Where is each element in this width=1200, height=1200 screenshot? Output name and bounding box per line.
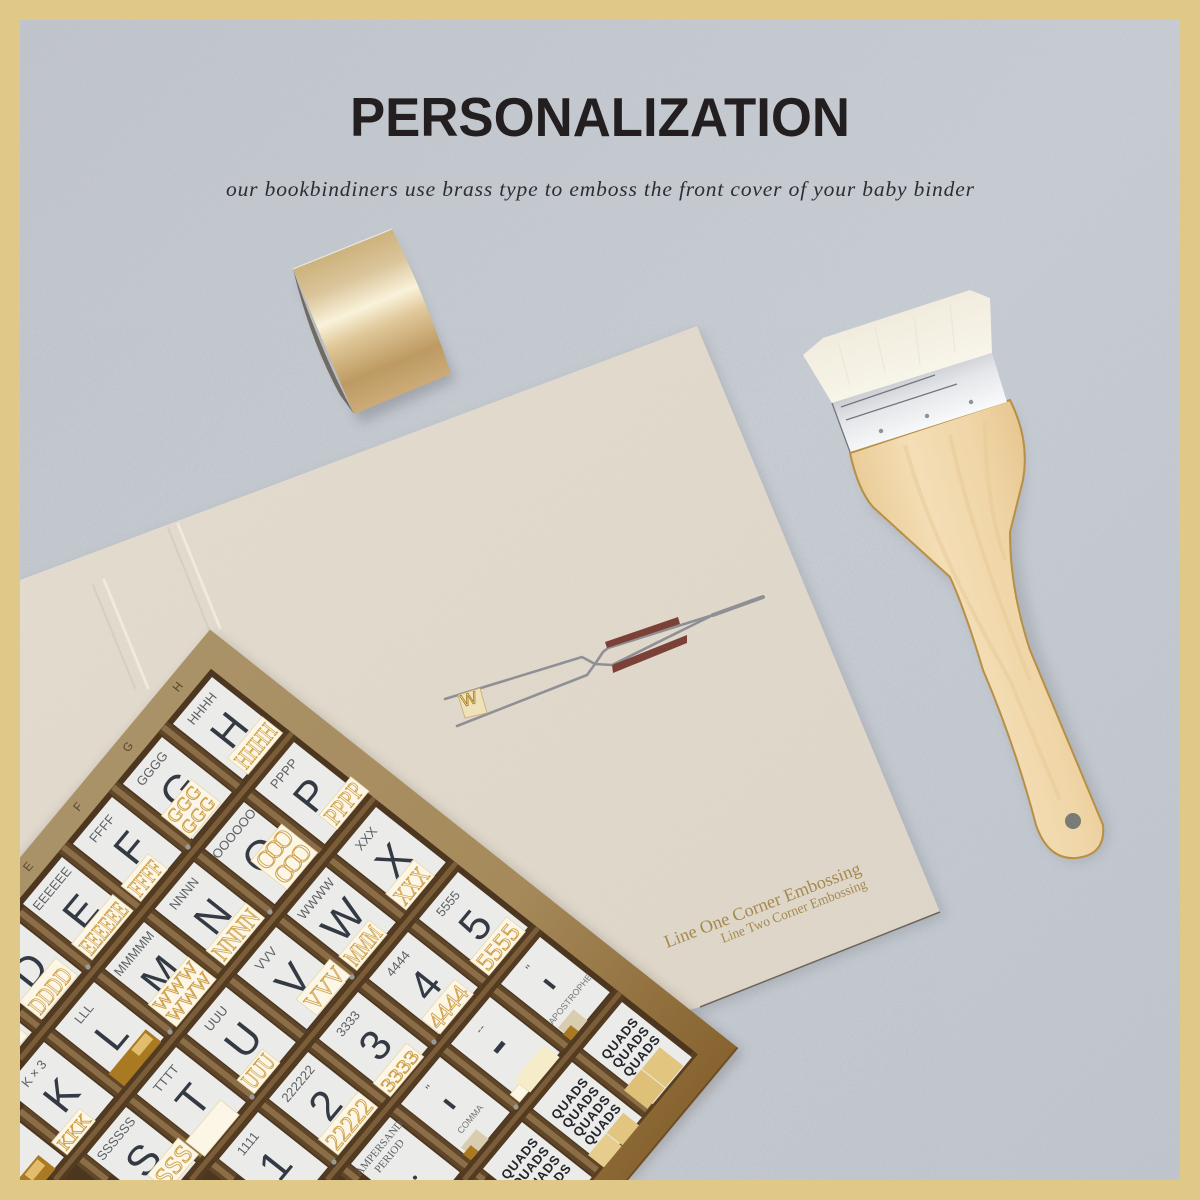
compartment quads row 2: QUADS <box>570 1092 613 1140</box>
compartment V: VVV <box>299 962 351 1016</box>
compartment V: V <box>266 954 322 1007</box>
compartment quads row 1: QUADS <box>609 1023 652 1071</box>
compartment J with brass block <box>20 1122 64 1180</box>
compartment hyphen: -- <box>471 1021 489 1037</box>
compartment M: MMMMM <box>111 928 157 979</box>
compartment T: TTTT <box>150 1062 182 1095</box>
compartment H: HHHH <box>184 690 220 728</box>
compartment 1 <box>219 1112 328 1200</box>
compartment P: PPPP <box>267 756 301 792</box>
compartment quads row 3: QUADS <box>498 1135 542 1182</box>
compartment 5: 5555 <box>433 888 463 919</box>
compartment D <box>20 924 82 1020</box>
compartment 4 <box>369 932 481 1037</box>
compartment comma: COMMA <box>455 1103 485 1135</box>
compartment 2: 2 <box>299 1082 352 1130</box>
compartment ampersand and period <box>348 1115 462 1200</box>
compartment H <box>173 677 284 781</box>
compartment M: WWW <box>163 969 216 1026</box>
compartment G <box>122 737 232 840</box>
compartment 4: 4 <box>399 962 452 1010</box>
compartment 2: 22222 <box>321 1094 379 1155</box>
compartment L: L <box>85 1012 138 1060</box>
compartment 4: 4444 <box>423 980 475 1034</box>
compartment W: W <box>312 890 376 951</box>
compartment 2 <box>268 1052 380 1157</box>
brass letter W <box>458 688 487 718</box>
compartment K: K × 3 <box>18 1057 50 1090</box>
compartment F <box>71 797 184 903</box>
compartment U: UUU <box>201 1003 231 1034</box>
compartment V <box>237 921 352 1030</box>
compartment K <box>20 1042 114 1156</box>
compartment S: S <box>116 1135 172 1187</box>
compartment quads row 1: QUADS <box>598 1015 642 1062</box>
compartment 3: 3 <box>349 1022 402 1070</box>
compartment M <box>104 922 218 1028</box>
compartment apostrophe: APOSTROPHE <box>546 972 594 1026</box>
compartment O <box>205 797 319 906</box>
icon: hake paint brush <box>803 290 1108 862</box>
compartment apostrophe: '' <box>522 962 537 975</box>
tray dividers <box>20 727 647 1180</box>
compartment E <box>22 855 135 962</box>
compartment O: O <box>232 828 291 883</box>
compartment quads row 1 <box>578 1002 692 1109</box>
compartment 3 <box>318 992 432 1098</box>
compartment S: SSSSSS <box>93 1114 139 1163</box>
compartment hyphen <box>449 997 562 1103</box>
compartment X: XXX <box>352 824 380 853</box>
brass letter W: W <box>459 688 480 711</box>
panel: linen binder cover <box>20 326 945 1016</box>
compartment N <box>154 862 267 967</box>
compartment S: SSS <box>150 1140 199 1191</box>
compartment P: P <box>284 770 340 822</box>
tray shadow <box>20 634 744 1180</box>
compartment quads row 2: QUADS <box>581 1101 624 1148</box>
compartment D: DDDD <box>24 963 78 1020</box>
compartment quads row 2 <box>532 1062 644 1168</box>
rail letters <box>20 679 186 874</box>
compartment G: GGG <box>177 793 220 838</box>
icon: tweezers holding brass W type <box>445 597 763 726</box>
compartment E: EEEEEE <box>29 864 75 913</box>
compartment M: M <box>132 947 192 1004</box>
brush bristles <box>803 290 992 403</box>
compartment F: FFFF <box>86 812 118 845</box>
compartment 2: 222222 <box>278 1062 318 1105</box>
title: PERSONALIZATION <box>350 86 850 148</box>
embossed cover text: Line One Corner Embossing <box>661 858 864 952</box>
compartment comma <box>400 1057 511 1161</box>
compartment L: LLL <box>71 1001 97 1027</box>
compartment 5: 5555 <box>471 919 526 976</box>
compartment O: OOO <box>251 824 300 875</box>
compartment 5: 5 <box>449 902 502 950</box>
brush metal ferrule <box>832 353 1007 452</box>
compartment W <box>286 867 399 972</box>
compartment K: KKK <box>54 1110 96 1154</box>
compartment N: NNNN <box>207 905 266 966</box>
brush handle <box>850 400 1103 858</box>
rail letters: G <box>119 739 136 755</box>
rail letters: H <box>170 679 186 695</box>
compartment apostrophe <box>500 936 611 1041</box>
compartment comma: '' <box>422 1082 437 1095</box>
compartment F: FFFF <box>123 856 169 902</box>
compartment 3: 3333 <box>333 1008 363 1039</box>
compartment quads row 1: QUADS <box>620 1032 663 1080</box>
compartment V: VVV <box>252 944 280 973</box>
compartment D: D <box>1 944 59 997</box>
compartment ampersand and period: PERIOD <box>372 1137 407 1175</box>
compartment K: K <box>34 1069 90 1122</box>
compartment 1: 1111 <box>234 1129 262 1158</box>
tray frame rails <box>20 630 738 1180</box>
compartment quads row 3 <box>483 1122 592 1200</box>
compartment L <box>54 982 165 1086</box>
compartment X <box>336 807 448 912</box>
compartment 4: 4444 <box>383 948 413 979</box>
compartment U: UUU <box>237 1049 281 1094</box>
compartment N: NNNN <box>166 875 202 913</box>
compartment U <box>184 987 299 1095</box>
tweezer rubber grips <box>605 617 687 673</box>
panel: wooden type tray with letter compartments <box>0 630 737 1200</box>
compartment C <box>20 1023 32 1046</box>
compartment W: MMM <box>339 921 388 971</box>
compartment X: XXX <box>389 863 435 910</box>
compartment quads row 3: QUADS <box>509 1143 552 1191</box>
compartment quads row 2: QUADS <box>548 1075 592 1122</box>
compartment P: PPPP <box>319 778 370 830</box>
compartment quads row 3: QUADS <box>520 1152 563 1200</box>
compartment O: OOO <box>269 839 318 889</box>
compartment G: GGGG <box>133 748 171 789</box>
compartment G: GGG <box>163 782 206 827</box>
compartment T: T <box>167 1076 221 1126</box>
compartment M: WWW <box>150 958 203 1016</box>
compartment T <box>132 1047 248 1156</box>
embossed cover text: Line Two Corner Embossing <box>719 877 869 947</box>
compartment S <box>87 1107 199 1180</box>
compartment 3: 3333 <box>377 1047 424 1096</box>
compartment P <box>255 736 371 846</box>
rail letters: F <box>70 799 86 814</box>
compartment U: U <box>215 1014 273 1067</box>
compartment H: H <box>201 704 259 757</box>
compartment 5 <box>418 872 531 977</box>
rail letters: E <box>20 859 36 874</box>
compartment E: EEEEEE <box>75 897 134 960</box>
compartment O: OOOOOO <box>209 806 259 862</box>
compartment X: X <box>366 835 422 887</box>
compartment F: F <box>104 823 159 873</box>
icon: gold foil tape roll <box>293 229 456 424</box>
compartment G: G <box>150 763 209 818</box>
compartment N: N <box>185 890 242 944</box>
compartment quads row 2: QUADS <box>559 1083 602 1131</box>
compartment W: WWWW <box>294 875 338 922</box>
subtitle: our bookbindiners use brass type to emboss the front cover of your baby binder <box>226 177 975 201</box>
compartment E: E <box>53 886 109 938</box>
compartment ampersand and period: AMPERSAND <box>353 1118 406 1178</box>
compartment 1: 1 <box>249 1142 302 1190</box>
compartment H: HHHH <box>230 719 283 774</box>
